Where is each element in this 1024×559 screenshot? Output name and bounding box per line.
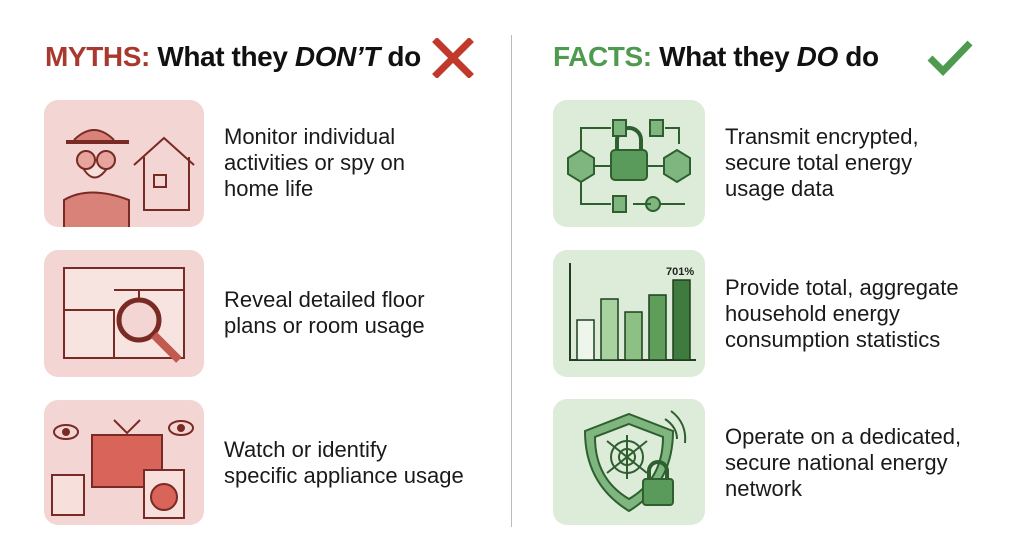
text: fact 2: household energy (725, 301, 900, 326)
text: myth 2: plans or room usage (224, 313, 425, 338)
text: fact 3: network (725, 476, 802, 501)
icon: green check (928, 40, 972, 76)
text: fact 1: usage data (725, 176, 834, 201)
panel: myth 3 (44, 400, 204, 525)
text: myth 1: home life (224, 176, 313, 201)
text: fact 2: Provide total, aggregate (725, 275, 959, 300)
text: myth 3: Watch or identify (224, 437, 387, 462)
text: myth 3 (224, 437, 464, 488)
panel: fact 2: 701% (666, 266, 694, 278)
text: fact 3 (725, 424, 961, 501)
panel: myth 1 (44, 100, 204, 227)
text: fact 3: secure national energy (725, 450, 948, 475)
text: fact 3: Operate on a dedicated, (725, 424, 961, 449)
panel: fact 1 (553, 100, 705, 227)
title: myths: MYTHS: What they DON’T do (45, 41, 421, 72)
text: fact 1: Transmit encrypted, (725, 124, 919, 149)
text: myth 2: Reveal detailed floor (224, 287, 425, 312)
title: facts: FACTS: What they DO do (553, 41, 879, 72)
text: myth 1: Monitor individual (224, 124, 395, 149)
text: fact 1 (725, 124, 919, 201)
panel: fact 2 (553, 250, 705, 377)
panel: myth 2 (44, 250, 204, 377)
text: myth 1: activities or spy on (224, 150, 405, 175)
text: myth 1 (224, 124, 405, 201)
text: fact 1: secure total energy (725, 150, 912, 175)
text: myth 3: specific appliance usage (224, 463, 464, 488)
panel: fact 3 (553, 399, 705, 525)
text: fact 2: consumption statistics (725, 327, 940, 352)
text: fact 2 (725, 275, 959, 352)
text: myth 2 (224, 287, 425, 338)
icon: red cross (432, 38, 474, 78)
